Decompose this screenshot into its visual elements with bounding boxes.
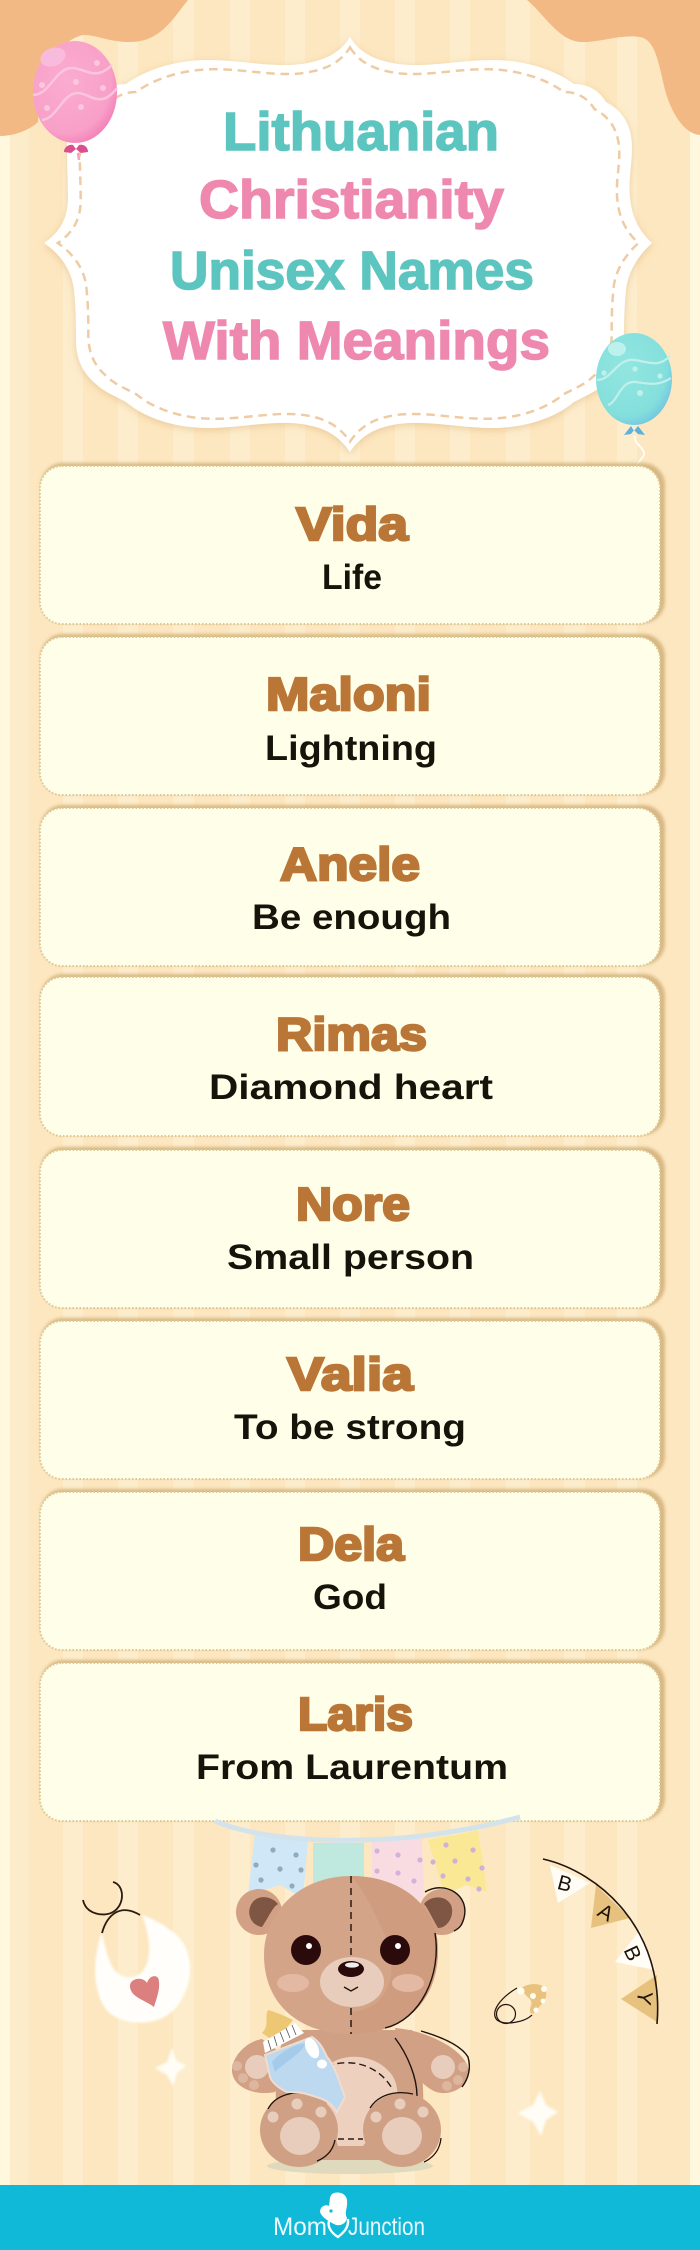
right foot (363, 2093, 441, 2167)
left ear (236, 1889, 282, 1935)
icon: baby bib (83, 1882, 190, 2023)
meaning: Lightning (265, 729, 437, 768)
title: Lithuanian (223, 102, 499, 162)
body (276, 2030, 423, 2160)
meaning: Diamond heart (209, 1068, 493, 1107)
meaning: Be enough (252, 898, 451, 937)
logo wordmark: Mom (273, 2213, 327, 2241)
meaning: Life (322, 558, 382, 597)
name: Nore (296, 1178, 410, 1230)
tummy patch (324, 2057, 397, 2146)
top curtain: left (0, 0, 188, 136)
title: Christianity (199, 170, 504, 230)
bunting garland (215, 1817, 520, 1900)
card: Vida (40, 463, 665, 624)
baby banner: A (594, 1899, 617, 1926)
name: Rimas (276, 1008, 427, 1060)
right inner ear (424, 1897, 452, 1928)
name: Dela (298, 1518, 404, 1570)
nose (338, 1961, 364, 1977)
name: Laris (298, 1688, 413, 1740)
card: Maloni (40, 634, 665, 795)
illustration: teddy bear (232, 1876, 469, 2174)
baby banner (543, 1859, 658, 2024)
meaning: To be strong (234, 1408, 466, 1447)
baby bottle (262, 2010, 345, 2112)
MomJunction logo (273, 2192, 425, 2241)
icon: safety pin (495, 1984, 547, 2024)
meaning: God (313, 1578, 387, 1617)
icon: left star (155, 2048, 186, 2086)
name: Valia (287, 1348, 413, 1400)
title: With Meanings (163, 311, 550, 371)
name: Vida (296, 498, 408, 550)
left inner ear (249, 1897, 278, 1927)
meaning: From Laurentum (196, 1748, 508, 1787)
name: Maloni (266, 668, 431, 720)
card: Dela (40, 1489, 665, 1650)
card: Rimas (40, 974, 665, 1136)
head (249, 1876, 452, 2034)
ground shadow (267, 2158, 433, 2174)
card: Valia (40, 1318, 665, 1479)
body seam (395, 2038, 417, 2096)
left arm (232, 2039, 290, 2093)
baby banner: B (555, 1871, 574, 1897)
card: Anele (40, 805, 665, 966)
icon: pink balloon (33, 41, 117, 160)
meaning: Small person (227, 1238, 474, 1277)
card: Laris (40, 1660, 665, 1821)
top curtain: right (527, 0, 700, 135)
muzzle (320, 1957, 384, 2007)
name: Anele (280, 838, 420, 890)
right ear (419, 1888, 465, 1935)
card: Nore (40, 1147, 665, 1308)
title: Unisex Names (170, 241, 534, 301)
icon: blue balloon (596, 333, 672, 470)
MomJunction logo: Junction (348, 2213, 425, 2241)
icon: right star (518, 2091, 558, 2136)
right arm (395, 2028, 469, 2093)
baby banner: B (619, 1942, 645, 1965)
eyes (291, 1935, 321, 1965)
baby banner: Y (631, 1989, 656, 2007)
title plaque (44, 37, 652, 452)
footer band (0, 2185, 700, 2250)
title (163, 102, 550, 371)
logo icon (320, 2192, 348, 2237)
cheeks (277, 1974, 309, 1992)
left foot (260, 2093, 338, 2167)
